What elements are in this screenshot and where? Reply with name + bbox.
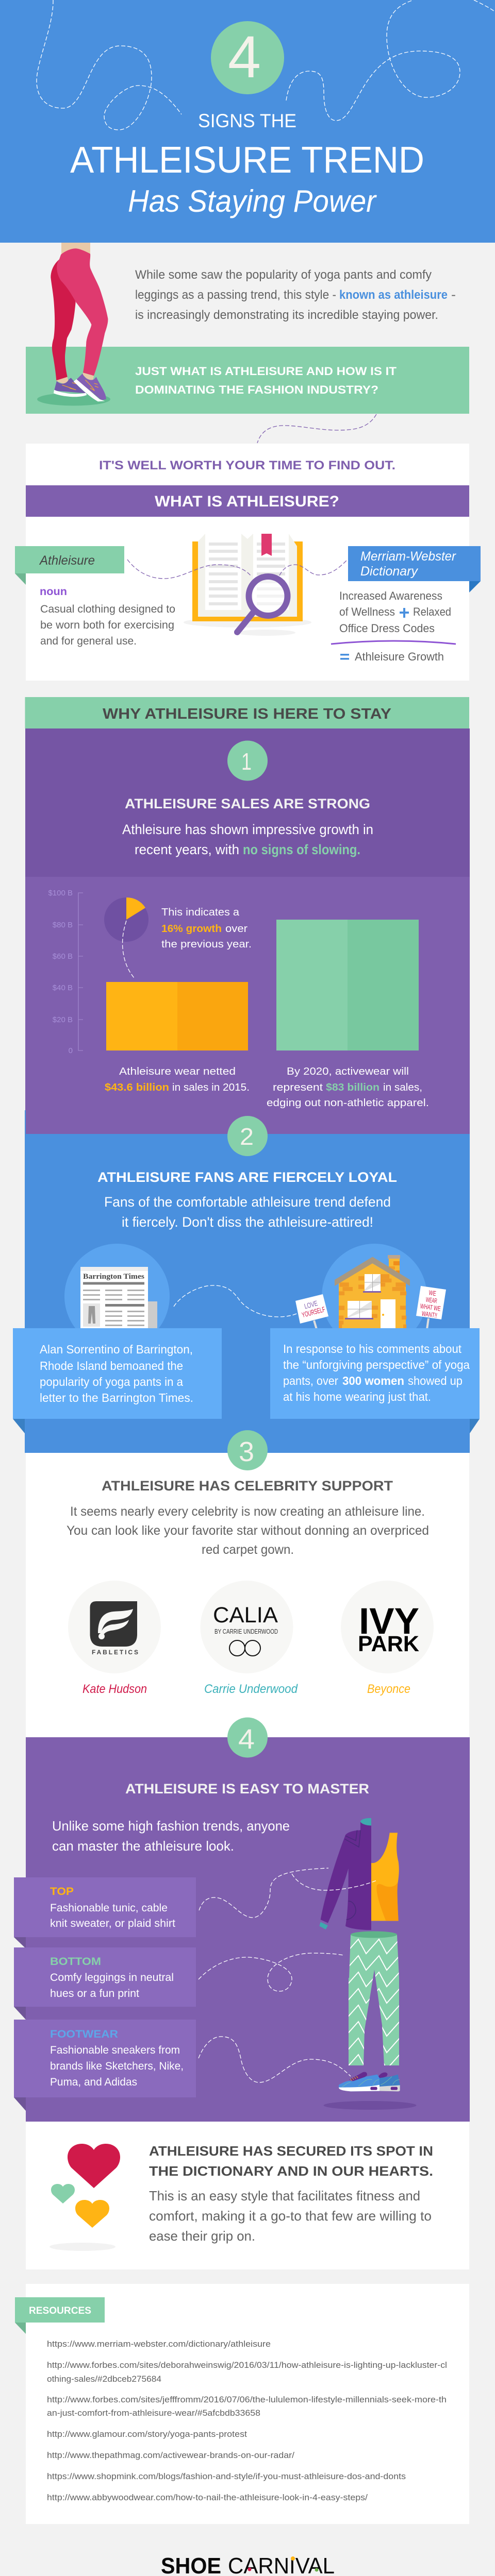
box: top: TOP: [50, 1886, 74, 1897]
box: letter: popularity of yoga pants in a: [40, 1375, 183, 1388]
heading: fans loyal: ATHLEISURE FANS ARE FIERCELY LOYAL: [97, 1170, 397, 1185]
caption: 2020 sales: in sales,: [383, 1082, 422, 1093]
logo: Ivy Park, Beyonce: Beyonce: [367, 1682, 410, 1696]
heading: why athleisure is here to stay: WHY ATHLEISURE IS HERE TO STAY: [103, 706, 391, 722]
sales text: recent years, with: [135, 842, 239, 857]
title: [70, 110, 424, 218]
resource links: http://www.abbywoodwear.com/how-to-nail-the-athleisure-look-in-4-easy-steps/: [47, 2493, 368, 2502]
box: letter: Alan Sorrentino of Barrington,: [40, 1343, 193, 1356]
equation text: of Wellness: [339, 605, 395, 618]
resource links: https://www.shopmink.com/blogs/fashion-and-style/if-you-must-athleisure-dos-and-donts: [47, 2471, 406, 2481]
conclusion text: This is an easy style that facilitates fitness and: [149, 2188, 420, 2204]
conclusion heading: [149, 2143, 433, 2179]
icon: house with protest signs: WEAR: [425, 1296, 438, 1305]
icon: athleisure outfit: [319, 1818, 417, 2110]
caption: 2015 sales: in sales in 2015.: [172, 1082, 250, 1093]
heading: what is athleisure: [26, 485, 469, 517]
heading: sales strong: ATHLEISURE SALES ARE STRONG: [125, 796, 370, 811]
number badge 4 small: [227, 1718, 268, 1758]
conclusion heading: ATHLEISURE HAS SECURED ITS SPOT IN: [149, 2143, 433, 2159]
box: letter: Rhode Island bemoaned the: [40, 1359, 183, 1372]
icon: legs in leggings and sneakers: [37, 243, 110, 406]
conclusion text: ease their grip on.: [149, 2228, 255, 2244]
bar chart: $100 B: [48, 889, 73, 897]
definition text: be worn both for exercising: [40, 619, 174, 631]
icon: house with protest signs: WE: [428, 1289, 437, 1297]
callout: worth your time: [26, 444, 469, 485]
banner: just what is athleisure: DOMINATING THE FASHION INDUSTRY?: [135, 383, 378, 396]
bar chart: $40 B: [53, 984, 73, 992]
caption: 2020 sales: represent: [273, 1082, 323, 1093]
number badge 4 small: 4: [238, 1724, 255, 1755]
sales text: [122, 822, 373, 857]
box: protest: at his home wearing just that.: [283, 1390, 431, 1403]
resource links: [47, 2339, 447, 2502]
resource links: an-just-comfort-from-athleisure-wear/#5afcbdb33658: [47, 2408, 260, 2418]
panel: header: [0, 0, 495, 243]
box: protest: showed up: [408, 1374, 463, 1387]
growth note: over: [225, 923, 248, 935]
ribbon: Merriam-Webster: [348, 546, 481, 592]
growth note: This indicates a: [161, 907, 240, 918]
panel: section 3 celebrity: [26, 1430, 469, 1737]
intro text: leggings as a passing trend, this style -: [135, 288, 336, 302]
celebrity text: You can look like your favorite star without donning an overpriced: [67, 1523, 429, 1538]
heading: what is athleisure: WHAT IS ATHLEISURE?: [155, 493, 339, 510]
box: bottom: hues or a fun print: [50, 1988, 139, 1999]
definition text: Casual clothing designed to: [40, 603, 175, 615]
icon: hearts: [50, 2144, 120, 2251]
callout: worth your time: IT'S WELL WORTH YOUR TIME TO FIND OUT.: [99, 459, 395, 472]
ribbon: athleisure: [15, 546, 124, 585]
number badge 1: 1: [241, 748, 252, 775]
resource links: http://www.glamour.com/story/yoga-pants-protest: [47, 2429, 247, 2439]
equation text: Increased Awareness: [339, 589, 442, 602]
caption: 2015 sales: Athleisure wear netted: [119, 1066, 236, 1077]
box: top: Fashionable tunic, cable: [50, 1902, 168, 1914]
definition text: and for general use.: [40, 635, 137, 647]
caption: 2020 sales: By 2020, activewear will: [287, 1066, 409, 1077]
caption: 2020 sales: edging out non-athletic apparel.: [267, 1097, 429, 1109]
conclusion text: comfort, making it a go-to that few are willing to: [149, 2208, 432, 2224]
box: protest: pants, over: [283, 1374, 338, 1387]
resource links: othing-sales/#2dbceb275684: [47, 2374, 161, 2384]
easy text: can master the athleisure look.: [52, 1838, 234, 1854]
connector dashes: [257, 414, 376, 443]
growth note: [161, 907, 252, 950]
logo: Shoe Carnival: [161, 2553, 335, 2576]
number badge 2: [227, 1116, 268, 1156]
ribbon: resources: [15, 2297, 105, 2334]
intro text: -: [451, 288, 456, 302]
box: bottom: [14, 1947, 196, 2020]
caption: 2015 sales: [105, 1066, 250, 1093]
sales text: Athleisure has shown impressive growth in: [122, 822, 373, 837]
equation text: [331, 589, 456, 663]
icon: house with protest signs: WHAT WE: [420, 1302, 441, 1313]
logo: Calia, Carrie Underwood: CALIA: [213, 1603, 278, 1628]
panel: conclusion: [26, 2122, 469, 2269]
bar chart: $80 B: [53, 921, 73, 929]
number badge 3: 3: [239, 1436, 254, 1467]
title: ATHLEISURE TREND: [70, 140, 424, 181]
ribbon: Merriam-Webster: Merriam-Webster: [360, 549, 457, 564]
banner: just what is athleisure: JUST WHAT IS ATHLEISURE AND HOW IS IT: [135, 365, 397, 378]
definition text: noun: [40, 586, 67, 598]
celebrity text: It seems nearly every celebrity is now creating an athleisure line.: [70, 1504, 425, 1519]
growth note: 16% growth: [161, 923, 222, 935]
banner: just what is athleisure: [26, 347, 469, 414]
logo: Calia, Carrie Underwood: [200, 1581, 298, 1696]
box: protest: In response to his comments about: [283, 1342, 462, 1355]
bar chart: 0: [69, 1046, 73, 1055]
bar chart: [48, 889, 419, 1055]
caption: 2020 sales: [267, 1066, 429, 1109]
number badge 4: [211, 21, 284, 94]
ribbon: athleisure: Athleisure: [39, 553, 95, 568]
equation text: Athleisure Growth: [355, 650, 444, 663]
connectors: [199, 1868, 376, 2082]
panel: resources: [15, 2284, 469, 2524]
fans text: Fans of the comfortable athleisure trend defend: [104, 1194, 391, 1210]
easy text: Unlike some high fashion trends, anyone: [52, 1818, 290, 1834]
heading: why athleisure is here to stay: [25, 697, 469, 728]
box: protest: 300 women: [342, 1374, 404, 1387]
bar chart: $60 B: [53, 952, 73, 961]
box: protest: [270, 1328, 480, 1433]
box: bottom: BOTTOM: [50, 1956, 101, 1968]
equation text: Relaxed: [413, 605, 451, 618]
fans text: it fiercely. Don't diss the athleisure-attired!: [122, 1214, 373, 1230]
equation text: Office Dress Codes: [339, 622, 435, 635]
intro text: [135, 268, 456, 322]
ribbon: Merriam-Webster: Dictionary: [360, 564, 418, 579]
pie chart: 16 percent: [104, 897, 148, 978]
caption: 2020 sales: $83 billion: [326, 1082, 380, 1093]
celebrity text: red carpet gown.: [202, 1543, 294, 1557]
box: footwear: Puma, and Adidas: [50, 2076, 137, 2088]
icon: newspaper: [64, 1244, 170, 1349]
conclusion text: [149, 2188, 432, 2244]
box: footwear: FOOTWEAR: [50, 2028, 118, 2040]
logo: Ivy Park, Beyonce: [341, 1581, 434, 1696]
caption: 2015 sales: $43.6 billion: [105, 1082, 169, 1093]
box: top: knit sweater, or plaid shirt: [50, 1918, 175, 1929]
definition text: [40, 586, 175, 647]
resource links: https://www.merriam-webster.com/dictionary/athleisure: [47, 2339, 271, 2349]
icon: house with protest signs: [295, 1244, 446, 1349]
number badge 3: [227, 1430, 268, 1470]
number badge 4: 4: [228, 24, 261, 90]
logo: Calia, Carrie Underwood: Carrie Underwood: [204, 1682, 298, 1696]
heading: easy to master: ATHLEISURE IS EASY TO MASTER: [125, 1781, 369, 1797]
resource links: http://www.thepathmag.com/activewear-brands-on-our-radar/: [47, 2450, 294, 2460]
intro text: known as athleisure: [339, 288, 448, 302]
box: letter: [13, 1328, 222, 1433]
box: footwear: brands like Sketchers, Nike,: [50, 2060, 184, 2072]
logo: Calia, Carrie Underwood: BY CARRIE UNDERWOOD: [214, 1628, 278, 1635]
icon: house with protest signs: YOURSELF: [301, 1305, 326, 1319]
bar chart: $20 B: [53, 1015, 73, 1024]
panel: section 4 easy: [14, 1718, 470, 2122]
panel: section 1 sales: [25, 728, 470, 1136]
logo: Fabletics, Kate Hudson: Kate Hudson: [82, 1682, 147, 1696]
intro text: While some saw the popularity of yoga pants and comfy: [135, 268, 432, 282]
title: Has Staying Power: [128, 184, 377, 218]
growth note: the previous year.: [161, 939, 252, 950]
icon: open book with magnifier: [184, 534, 311, 636]
heading: celebrity support: ATHLEISURE HAS CELEBRITY SUPPORT: [102, 1478, 393, 1494]
box: footwear: [14, 2020, 196, 2111]
conclusion heading: THE DICTIONARY AND IN OUR HEARTS.: [149, 2163, 433, 2179]
panel: definition: [15, 517, 481, 681]
logo: Ivy Park, Beyonce: PARK: [358, 1632, 419, 1656]
box: top: [14, 1877, 196, 1948]
box: protest: the “unforgiving perspective” of yoga: [283, 1358, 470, 1371]
sales text: no signs of slowing.: [243, 842, 360, 857]
title: SIGNS THE: [198, 110, 296, 131]
box: letter: letter to the Barrington Times.: [40, 1391, 193, 1404]
resource links: http://www.forbes.com/sites/deborahweinswig/2016/03/11/how-athleisure-is-lighting-up-lackluster-cl: [47, 2360, 447, 2370]
logo: Fabletics, Kate Hudson: [68, 1581, 161, 1696]
fans text: [104, 1194, 391, 1230]
logo: Ivy Park, Beyonce: IVY: [359, 1601, 419, 1642]
box: footwear: Fashionable sneakers from: [50, 2044, 180, 2056]
ribbon: resources: RESOURCES: [29, 2306, 91, 2316]
number badge 2: 2: [240, 1123, 254, 1150]
icon: newspaper: Barrington Times: [83, 1273, 144, 1281]
icon: house with protest signs: LOVE: [303, 1299, 319, 1310]
logo: Fabletics, Kate Hudson: FABLETICS: [92, 1649, 138, 1656]
easy text: [52, 1818, 290, 1854]
number badge 1: [227, 741, 268, 781]
intro text: is increasingly demonstrating its incredible staying power.: [135, 308, 438, 322]
box: bottom: Comfy leggings in neutral: [50, 1972, 174, 1984]
resource links: http://www.forbes.com/sites/jefffromm/2016/07/06/the-lululemon-lifestyle-millennials-seek-more-th: [47, 2395, 447, 2404]
celebrity text: [67, 1504, 429, 1557]
icon: house with protest signs: WANT!!: [421, 1310, 438, 1319]
panel: section 2 fans: [13, 1116, 480, 1453]
